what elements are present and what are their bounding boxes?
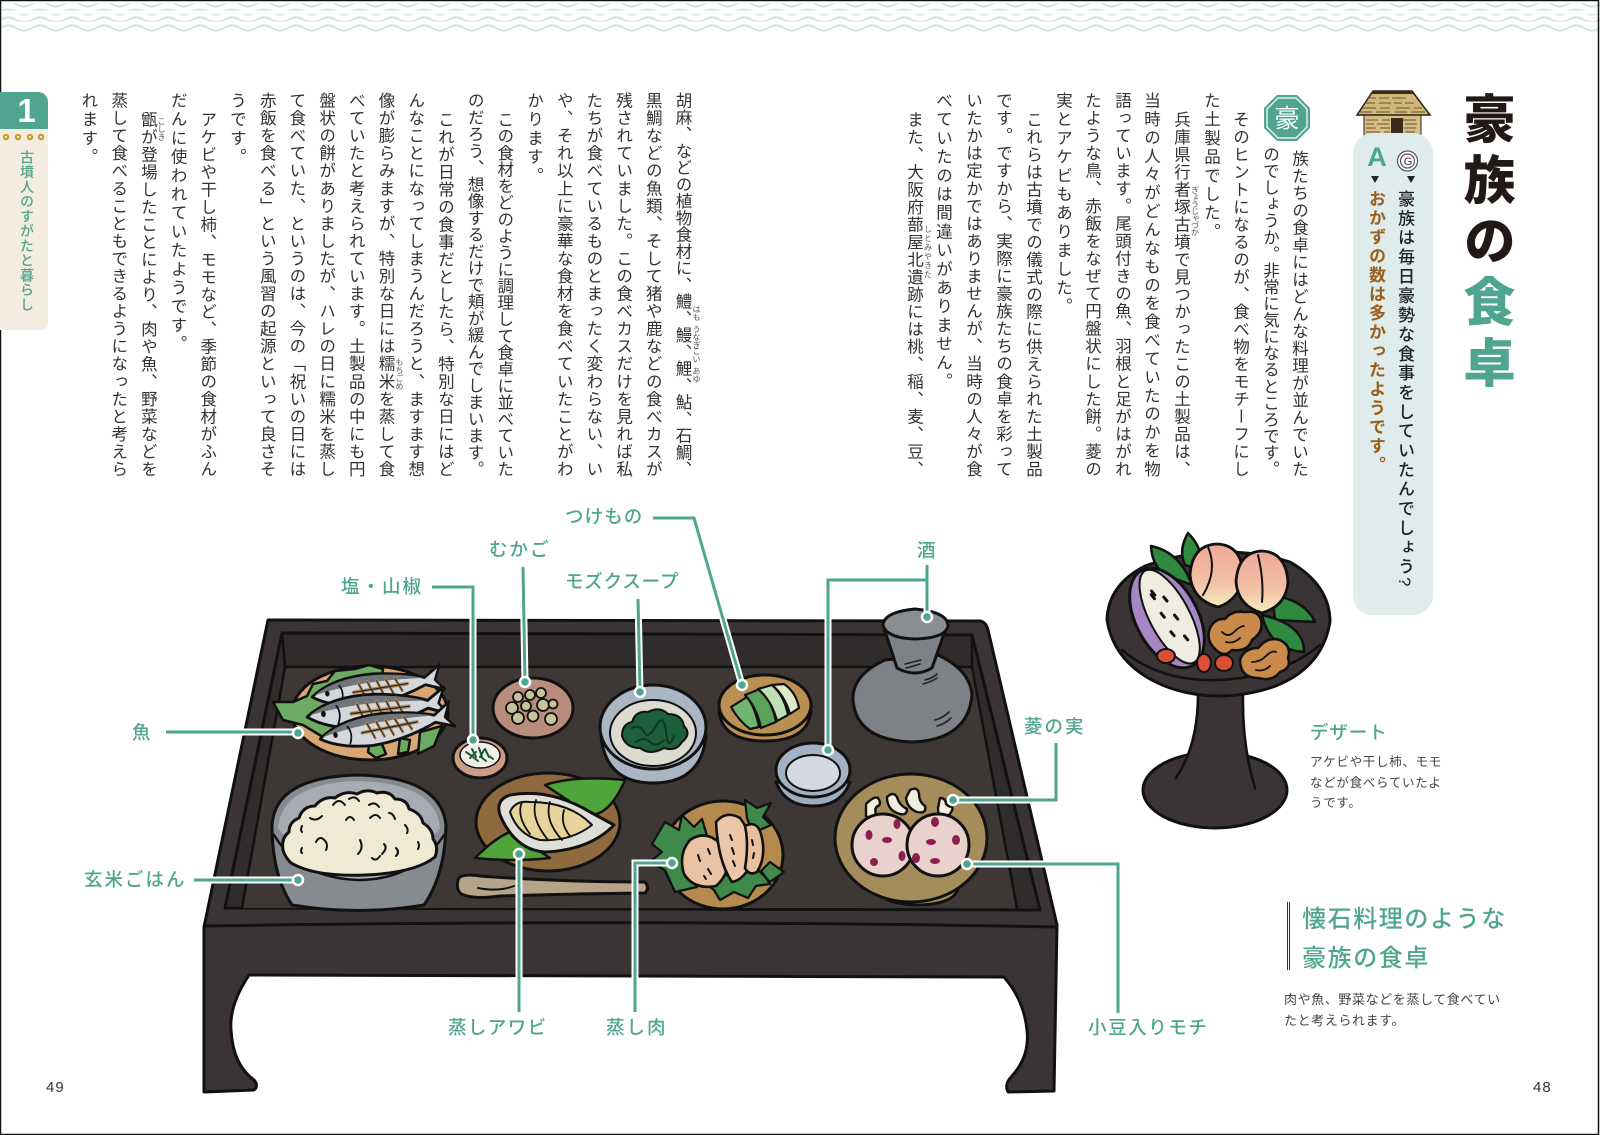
body text: right page: です。ですから、実際に豪族たちの食卓を彩って [994,92,1012,477]
body text: right page: べていたのは間違いがありません。 [934,92,952,391]
ruby: しとみやきた: しとみやきた [924,225,932,279]
dessert: peaches [1190,544,1288,613]
panel: question and answer [1353,133,1433,615]
body text: right page: また、大阪府蔀屋北遺跡には桃、稲、麦、豆、 [904,111,922,477]
ruby: はも うなぎ こい あゆ [692,305,701,383]
ruby: ぎょうじゃづか: ぎょうじゃづか [1190,186,1200,235]
dessert caption [1310,722,1442,810]
body text: left page: 甑が登場したことにより、肉や魚、野菜などを [138,111,156,477]
table [204,620,1057,1092]
abalone plate [475,773,625,871]
ruby: こしき: こしき [157,117,166,141]
side note: body: たと考えられます。 [1284,1013,1405,1028]
label: 小豆入りモチ: 小豆入りモチ [1088,1017,1209,1038]
label: 菱の実: 菱の実 [1024,716,1086,737]
fish plate [273,664,456,760]
dessert caption: body: うです。 [1310,796,1362,810]
side note: heading [1302,906,1507,972]
dessert: red fruits [1157,649,1233,672]
main title: 豪族の 食卓 [1455,92,1513,397]
answer text: おかずの数は多かったようです。 [1366,190,1385,475]
body text: right page: た土製品でした。 [1202,92,1220,242]
sake cup [776,743,850,806]
answer letter A: A [1367,142,1387,172]
body text: left page: かります。 [524,92,542,186]
body text: right page: そのヒントになるのが、食べ物をモチーフにし [1230,111,1248,477]
body text: left page: アケビや干し柿、モモなど、季節の食材がふん [198,111,216,477]
body text: right page: 族たちの食卓にはどんな料理が並んでいた [1290,150,1308,477]
steamed meat plate [650,800,784,909]
dessert caption: body: アケビや干し柿、モモ [1310,755,1442,769]
label: 玄米ごはん: 玄米ごはん [84,869,187,890]
label: むかご: むかご [489,539,551,560]
dessert stand [1107,533,1330,828]
dessert: dried persimmons [1208,612,1289,679]
label: つけもの: つけもの [565,506,643,527]
body text: left page: や、それ以上に豪華な食材を食べていたことがわ [554,92,572,477]
body text: left page: て食べていた、というのは、今の「祝いの日には [287,92,305,477]
body text: left page: のだろう、想像するだけで頬が緩んでしまいます。 [465,92,483,477]
chapter tab: vertical title: 古墳人のすがたと暮らし [19,150,35,312]
body text: right page [904,92,1308,477]
dessert caption: body: などが食べらていたよ [1310,776,1442,790]
chapter tab: green number block [0,92,48,129]
body text: left page: 像が膨らみますが、特別な日には糯米を蒸して食 [376,92,394,477]
icon: thatched hut [1356,90,1432,136]
body text: right page: のでしょうか。非常に気になるところです。 [1260,146,1278,477]
question text: 豪族は毎日豪勢な食事をしていたんでしょう? [1395,190,1414,589]
side note: double rule [1287,902,1290,970]
body text: right page: これらは古墳での儀式の際に供えられた土製品 [1024,111,1042,477]
body text: left page: 黒鯛などの魚類、そして猪や鹿などの食べカスが [643,92,661,477]
label: 塩・山椒: 塩・山椒 [341,576,423,597]
body text: left page: 赤飯を食べる」という風習の起源といって良さそ [257,92,275,477]
dessert caption: heading: デザート [1310,722,1388,743]
arrow markers [1371,176,1415,183]
body text: left page: 残されていました。この食べカスだけを見れば私 [614,92,632,477]
body text: right page: 兵庫県行者塚古墳で見つかったこの土製品は、 [1172,111,1190,477]
chapter tab: dots [2,134,44,140]
body text: left page: この食材をどのように調理して食卓に並べていた [495,111,513,477]
leader lines [166,518,1118,1013]
ruby: はも うなぎ こい あゆ: あゆ [692,367,701,383]
side note [1284,902,1507,1028]
side note: heading: 豪族の食卓 [1302,945,1430,972]
wooden spoon [457,875,648,897]
side note: body: 肉や魚、野菜などを蒸して食べてい [1284,992,1501,1007]
body text: right page: 語っています。尾頭付きの魚、羽根と足がはがれ [1112,92,1130,477]
body text: left page: これが日常の食事だとしたら、特別な日にはど [435,111,453,477]
body text: left page: べていたと考えられています。土製品の中にも円 [346,92,364,477]
label: 蒸しアワビ: 蒸しアワビ [448,1017,548,1038]
chapter tab [0,92,48,330]
ruby: もちごめ: もちごめ [395,358,404,390]
sake flask [853,609,972,742]
icon: Q mark: G [1404,156,1412,168]
body text: left page: 胡麻、などの植物食材に、鱧、鰻、鯉、鮎、石鯛、 [673,92,691,477]
body text: left page: 蒸して食べることもできるようになったと考えら [109,92,127,477]
icon: Q mark [1396,150,1418,172]
label: 蒸し肉: 蒸し肉 [606,1017,668,1038]
pickles plate [719,675,811,741]
rice bowl [272,775,446,910]
body text: right page: 当時の人々がどんなものを食べていたのかを物 [1142,92,1160,477]
mochi bowl [835,774,987,905]
body text: left page: れます。 [79,92,97,167]
salt and pepper dish [453,738,507,778]
body text: left page: たちが食べているものとまったく変わらない、い [584,92,602,477]
side note: body [1284,992,1501,1028]
body text: left page: だんに使われていたようです。 [168,92,186,354]
body text: left page: んなことになってしまうんだろうと、ますます想 [406,92,424,477]
dessert: leaves [1151,533,1315,652]
dessert: akebi [1114,556,1220,680]
chapter tab: green number block: 1 [17,92,36,129]
mozuku soup bowl [600,685,706,783]
body text: left page: うです。 [228,92,246,167]
mukago dish [493,678,573,738]
page number 48: 48 [1533,1079,1552,1096]
label: 酒: 酒 [917,540,938,561]
label: モズクスープ: モズクスープ [565,571,679,592]
body text: right page: たような鳥、赤飯をなぜて円盤状にした餅。菱の [1082,92,1100,477]
body text: left page [79,92,701,477]
body text: right page: 実とアケビもありました。 [1054,92,1072,316]
ruby: はも うなぎ こい あゆ: こい [692,347,701,363]
dessert caption: body [1310,755,1442,810]
chapter tab: beige body [0,129,48,330]
badge: 豪 octagon: 豪 [1274,105,1300,133]
side note: heading: 懐石料理のような [1302,906,1507,933]
page number 49: 49 [46,1079,65,1096]
ruby: はも うなぎ こい あゆ: うなぎ [692,325,701,349]
body text: right page: いたかは定かではありませんが、当時の人々が食 [964,92,982,477]
ruby: はも うなぎ こい あゆ: はも [692,305,701,321]
badge: 豪 octagon [1264,95,1310,141]
body text: left page: 盤状の餅がありましたが、ハレの日に糯米を蒸し [317,92,335,477]
label: 魚: 魚 [132,722,153,743]
